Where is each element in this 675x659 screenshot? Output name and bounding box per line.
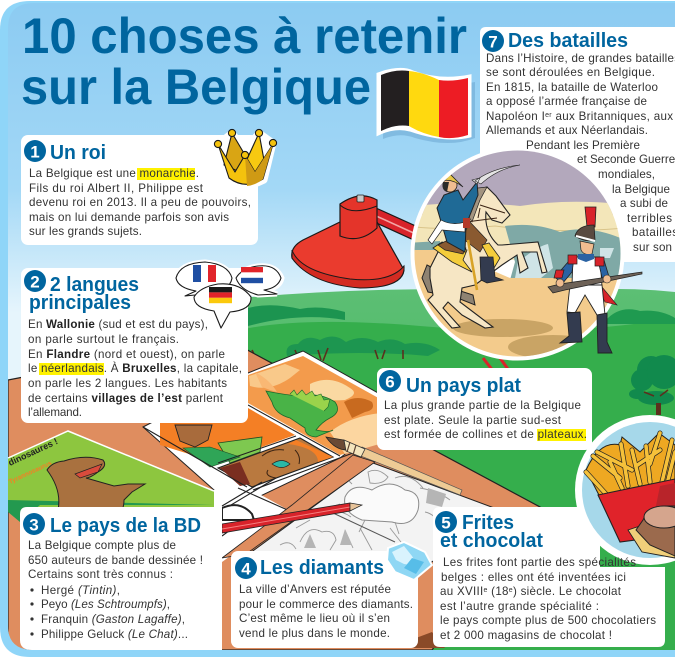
- heading 2: principales: [29, 292, 131, 314]
- text 7: aux Britanniques, aux: [552, 110, 673, 123]
- text 7: sur son: [633, 241, 672, 254]
- text 1: [29, 167, 251, 238]
- text 5: [440, 556, 656, 642]
- text 3: Peyo (Les Schtroumpfs),: [41, 598, 170, 611]
- badge 5: 5: [441, 514, 451, 532]
- text 2: on parle les 2 langues. Les habitants: [28, 377, 227, 390]
- badge 5: [435, 511, 457, 533]
- text 7: a subi de: [620, 197, 668, 210]
- text 3: [28, 539, 203, 641]
- panel 7: batailles: [405, 27, 675, 360]
- heading 6: Un pays plat: [406, 375, 521, 397]
- badge 2: 2: [30, 272, 40, 292]
- text 4: C’est même le lieu où il s’en: [239, 612, 390, 625]
- badge 7: [482, 30, 504, 52]
- text 2: l’allemand.: [28, 406, 82, 419]
- paintbrush: [326, 437, 462, 495]
- text 7: Pendant les Première: [526, 139, 640, 152]
- illustration: fries and chocolate: [575, 415, 675, 565]
- panel 3: pays de la BD: [20, 507, 222, 650]
- highlight: monarchie: [137, 168, 195, 180]
- heading 1: Un roi: [50, 142, 106, 164]
- badge 7: 7: [488, 32, 498, 52]
- flag: Pays-Bas: [241, 267, 263, 283]
- text 2: on parle surtout le français.: [28, 333, 179, 346]
- text 6: [384, 399, 587, 441]
- text 5: le pays compte plus de 500 chocolatiers: [440, 614, 656, 627]
- text 5: Les frites font partie des spécialités: [443, 556, 636, 569]
- text 5: e: [483, 587, 487, 594]
- badge 3: [23, 513, 45, 535]
- text 6: est formée de collines et de plateaux.: [384, 428, 587, 441]
- badge 3: 3: [29, 516, 39, 534]
- text 2: le néerlandais. À Bruxelles, la capitale,: [28, 362, 242, 375]
- text 5: belges : elles ont été inventées ici: [441, 571, 626, 584]
- text 3: 650 auteurs de bande dessinée !: [28, 554, 203, 567]
- badge 1: 1: [30, 142, 40, 162]
- panel 6: pays plat: [377, 368, 592, 450]
- text 3: Philippe Geluck (Le Chat)...: [41, 628, 188, 641]
- text 7: Napoléon I: [486, 110, 545, 123]
- text 7: Allemands et aux Néerlandais.: [486, 124, 648, 137]
- panel 5: frites et chocolat: [433, 415, 675, 647]
- coloring page: [240, 463, 505, 570]
- horse and rider: [422, 165, 547, 328]
- heading 5: [440, 512, 543, 552]
- highlight: néerlandais: [39, 363, 104, 375]
- badge 4: 4: [241, 560, 251, 578]
- heading 5: Frites: [462, 512, 514, 534]
- text 1: devenu roi en 2013. Il a peu de pouvoirs,: [29, 196, 251, 209]
- flag: Allemagne: [209, 287, 232, 303]
- text 1: mais on lui demande parfois son avis: [29, 211, 229, 224]
- dinosaur on cover: [47, 457, 145, 510]
- pencil: [222, 503, 362, 533]
- text 4: pour le commerce des diamants.: [239, 598, 413, 611]
- title: [21, 8, 467, 115]
- title: 10 choses à retenir: [22, 8, 467, 64]
- illustration: battle circle: [405, 145, 642, 360]
- text 7: [486, 52, 675, 254]
- flag of Belgium: [378, 69, 475, 143]
- text 1: sur les grands sujets.: [29, 225, 142, 238]
- text 2: de certains villages de l’est parlent: [28, 392, 224, 405]
- red stand: [292, 195, 510, 372]
- text 5: ) siècle. Le chocolat: [513, 585, 622, 598]
- heading 5: et chocolat: [440, 530, 543, 552]
- title: sur la Belgique: [21, 59, 371, 115]
- heading 3: Le pays de la BD: [50, 515, 201, 537]
- badge 6: 6: [385, 372, 395, 392]
- soldier: [548, 207, 642, 353]
- text 4: [239, 583, 413, 640]
- text 6: La plus grande partie de la Belgique: [384, 399, 581, 412]
- trees behind the page: [252, 336, 440, 361]
- text 2: En Flandre (nord et ouest), on parle: [28, 348, 225, 361]
- text 5: est l’autre grande spécialité :: [440, 600, 599, 613]
- heading 4: Les diamants: [260, 557, 384, 579]
- icon: diamond: [387, 542, 432, 580]
- badge 2: [24, 270, 46, 292]
- book title: dinosaures !: [7, 436, 59, 468]
- badge 1: [24, 140, 46, 162]
- text 3: Hergé (Tintin),: [41, 584, 120, 597]
- flag: France: [193, 265, 216, 282]
- desk: [8, 338, 540, 650]
- text 4: La ville d’Anvers est réputée: [239, 583, 391, 596]
- text 5: au XVIII: [440, 585, 483, 598]
- heading 2: [29, 274, 139, 314]
- heading 2: 2 langues: [50, 274, 139, 296]
- highlight: plateaux: [537, 429, 586, 441]
- text 7: se sont déroulées en Belgique.: [486, 66, 655, 79]
- text 3: La Belgique compte plus de: [28, 539, 176, 552]
- text 7: terribles: [627, 212, 672, 225]
- panel 1: un roi: [21, 135, 258, 245]
- badge 4: [235, 557, 257, 579]
- text 7: la Belgique: [612, 183, 670, 196]
- comic book: [7, 431, 214, 522]
- comic lower panel and desk strip: [214, 455, 375, 562]
- text 7: er: [545, 112, 552, 119]
- text 5: e: [509, 587, 513, 594]
- heading 7: Des batailles: [508, 30, 628, 52]
- text 6: est plate. Seule la partie sud-est: [384, 414, 562, 427]
- text 2: En Wallonie (sud et est du pays),: [28, 318, 208, 331]
- icon: speech bubbles with flags: [176, 262, 282, 328]
- panel 4: diamants: [231, 551, 418, 648]
- panel 2: langues: [21, 268, 248, 423]
- text 7: Dans l’Histoire, de grandes batailles: [486, 52, 675, 65]
- text 3: Franquin (Gaston Lagaffe),: [41, 613, 185, 626]
- icon: crown: [214, 129, 277, 186]
- text 5: et 2 000 magasins de chocolat !: [440, 629, 612, 642]
- comic book: Tyrannosaurus: [8, 460, 53, 486]
- badge 6: [379, 370, 401, 392]
- text 1: Fils du roi Albert II, Philippe est: [29, 182, 204, 195]
- text 7: a opposé l’armée française de: [486, 95, 647, 108]
- tree right: [629, 355, 675, 415]
- text 4: vend le plus dans le monde.: [239, 627, 390, 640]
- text 3: Certains sont très connus :: [28, 568, 173, 581]
- text 1: La Belgique est une monarchie.: [29, 167, 199, 180]
- text 2: [28, 318, 242, 419]
- text 7: En 1815, la bataille de Waterloo: [486, 81, 658, 94]
- green stegosaurus: [266, 391, 338, 437]
- comic page: [143, 351, 405, 505]
- text 5: (18: [488, 585, 509, 598]
- text 7: mondiales,: [598, 168, 655, 181]
